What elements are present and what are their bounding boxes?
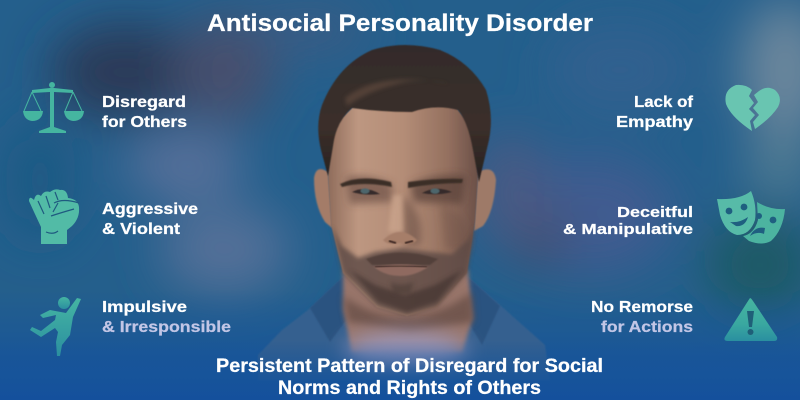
text: aggressive and violent: & Violent <box>102 221 181 238</box>
text: deceitful and manipulative: Deceitful <box>617 204 693 221</box>
mouth <box>374 264 428 276</box>
text: aggressive and violent <box>102 201 198 238</box>
bottom caption: Norms and Rights of Others <box>278 378 541 399</box>
icon: fist <box>29 189 79 244</box>
icon: broken heart <box>725 85 780 131</box>
eyes <box>352 188 452 195</box>
icon: scales <box>23 82 84 133</box>
text: aggressive and violent: Aggressive <box>102 201 198 218</box>
title: Antisocial Personality Disorder <box>207 10 593 37</box>
icon: theatre masks <box>717 191 785 244</box>
icon: warning triangle <box>724 298 777 341</box>
bottom caption: Persistent Pattern of Disregard for Social <box>216 356 603 377</box>
text: lack of empathy: Empathy <box>616 114 693 131</box>
face <box>328 100 478 316</box>
text: deceitful and manipulative: & Manipulative <box>563 221 693 238</box>
ears <box>314 169 332 228</box>
text: impulsive and irresponsible <box>102 299 231 336</box>
bottom caption <box>216 356 603 399</box>
lower neck glow <box>344 332 468 372</box>
hair <box>318 45 491 182</box>
text: lack of empathy: Lack of <box>634 94 694 111</box>
text: deceitful and manipulative <box>563 204 693 238</box>
text: no remorse for actions: for Actions <box>601 319 693 336</box>
text: disregard for others: Disregard <box>102 94 186 111</box>
icon: running figure <box>30 297 81 356</box>
nose highlight <box>388 195 403 232</box>
neck <box>343 270 473 352</box>
portrait of man <box>258 45 550 380</box>
eyebrows <box>340 178 463 188</box>
shirt <box>258 276 550 380</box>
text: no remorse for actions <box>591 299 693 336</box>
text: disregard for others <box>102 94 187 131</box>
text: impulsive and irresponsible: & Irresponsible <box>102 319 231 336</box>
text: disregard for others: for Others <box>102 114 187 131</box>
text: lack of empathy <box>616 94 694 131</box>
bottom blue fade <box>0 340 800 400</box>
beard <box>332 226 475 316</box>
text: impulsive and irresponsible: Impulsive <box>102 299 187 316</box>
face shadows <box>346 175 470 250</box>
text: no remorse for actions: No Remorse <box>591 299 693 316</box>
